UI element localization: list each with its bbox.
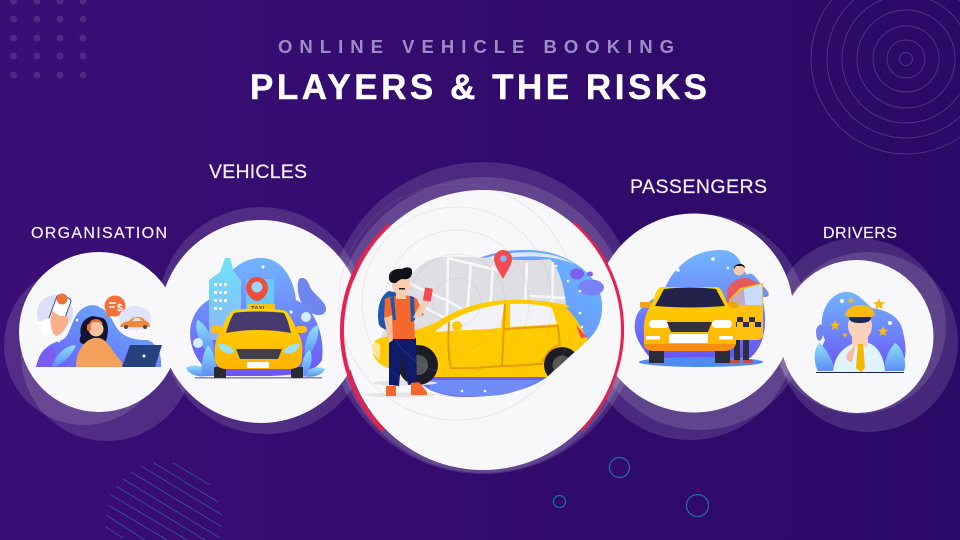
panel: passengers	[594, 214, 794, 412]
label: vehicles: VEHICLES	[209, 161, 307, 183]
red ring arcs	[342, 223, 622, 430]
panel: vehicles	[160, 220, 362, 423]
label: drivers: DRIVERS	[823, 225, 897, 242]
illustration: agent with laptop: $	[117, 303, 123, 314]
dot grid decoration	[10, 0, 86, 78]
label: passengers: PASSENGERS	[630, 176, 767, 198]
illustration: agent with laptop	[36, 294, 162, 367]
label: organisation: ORGANISATION	[31, 225, 167, 242]
faint radar rings	[339, 184, 575, 420]
illustration: taxi driver	[815, 292, 906, 373]
main heading: PLAYERS & THE RISKS	[250, 68, 707, 107]
title block	[250, 36, 707, 107]
subtitle: ONLINE VEHICLE BOOKING	[278, 36, 674, 57]
panel: drivers	[780, 260, 934, 413]
illustration: taxi in the city: TAXI	[251, 306, 265, 312]
small outline circles	[554, 458, 708, 516]
illustration: traveller and yellow car on map	[365, 250, 604, 398]
illustration: taxi in the city	[186, 258, 326, 378]
panel: central circle	[339, 184, 622, 470]
concentric rings decoration	[811, 0, 960, 154]
panel: organisation	[19, 252, 179, 412]
illustration: taxi and passenger	[635, 250, 769, 367]
circle halos	[4, 162, 958, 474]
diagonal hatch decoration	[106, 463, 222, 540]
